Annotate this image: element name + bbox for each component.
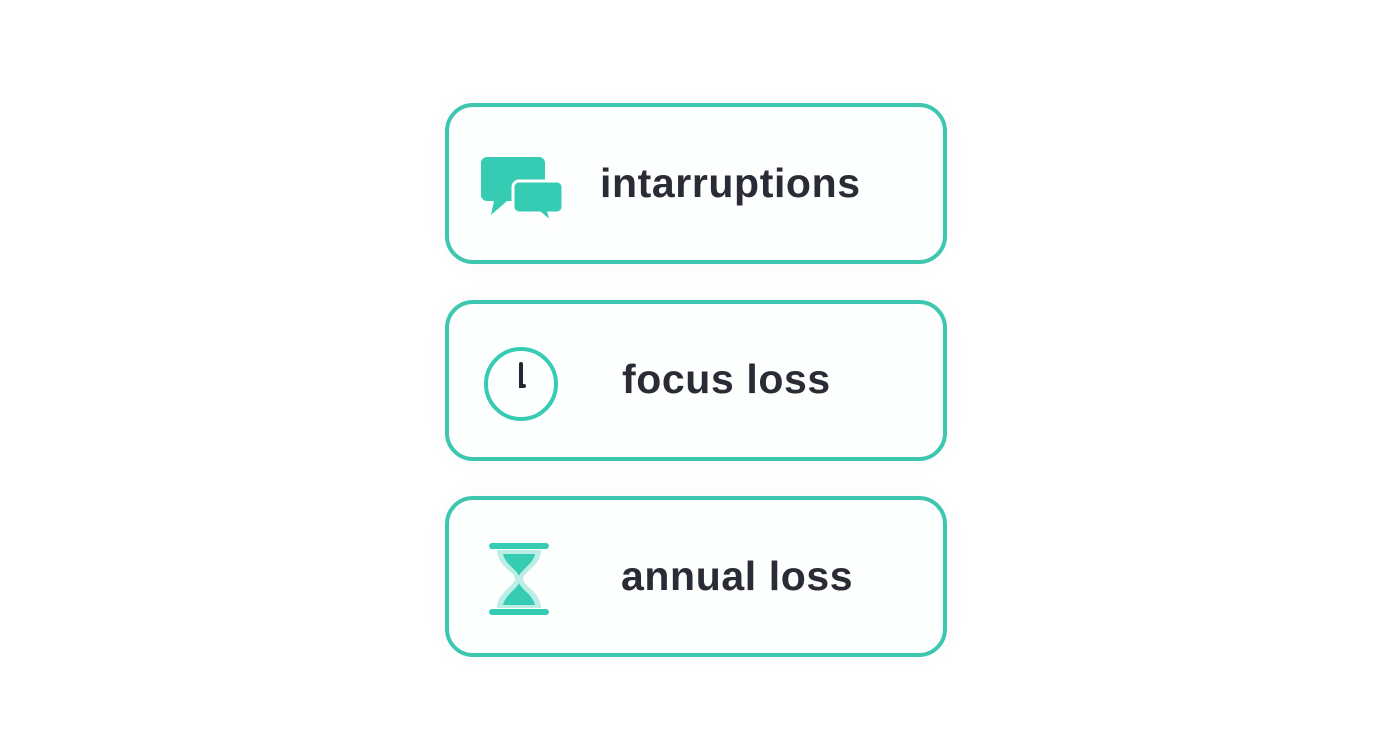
icon: chat bubbles: [481, 157, 562, 219]
label: intarruptions: intarruptions: [600, 160, 861, 206]
label: focus loss: focus loss: [622, 356, 831, 402]
card: interruptions: [445, 103, 947, 264]
icon: clock: [484, 347, 558, 421]
card: focus loss: [445, 300, 947, 461]
icon: hourglass: [489, 543, 549, 615]
label: annual loss: annual loss: [621, 553, 853, 599]
card: annual loss: [445, 496, 947, 657]
